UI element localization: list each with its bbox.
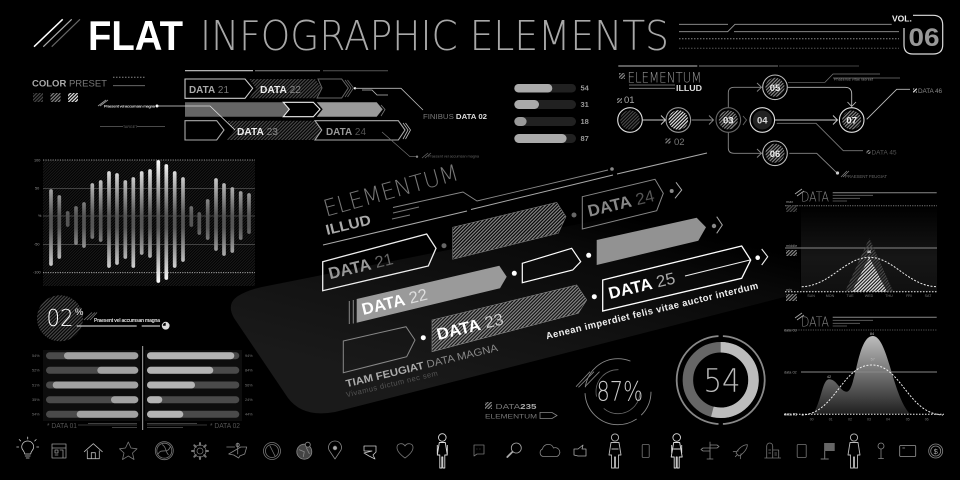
progress bars: top: 54 <box>580 84 590 92</box>
icon: search <box>507 443 521 457</box>
central pointer: row 3 <box>755 249 768 265</box>
icon: woman 1 <box>437 434 447 468</box>
central dot <box>572 212 576 218</box>
icon: woman 2 <box>671 434 682 468</box>
area chart: data levels: 42 <box>827 375 831 379</box>
central hatched arrow: top <box>453 202 566 259</box>
central empty box: row 2 <box>522 248 581 283</box>
flow node 06 <box>763 141 787 166</box>
flow node 06: 06 <box>770 149 780 160</box>
central heading: ELEMENTUM <box>321 160 462 222</box>
icon: home <box>84 444 102 459</box>
gauge: 87 percent <box>576 359 651 425</box>
line chart: weekly data: middle <box>786 244 797 248</box>
icon: cloud <box>540 444 560 456</box>
icon: map pin star <box>328 441 342 459</box>
area chart: data levels: 06 <box>925 418 929 422</box>
comparison bars: data 02: 84% <box>245 368 253 372</box>
flow diagram heading: 02 <box>674 137 685 148</box>
central grey box: row 3 <box>343 327 415 373</box>
flow diagram labels: PRAESENT FEUGIAT <box>845 174 887 179</box>
donut: 54 <box>677 334 765 426</box>
02 percent callout: 02 <box>46 306 74 332</box>
icon: signpost <box>701 442 719 459</box>
central captions <box>345 281 759 399</box>
area chart: data levels: 02 <box>848 418 852 422</box>
central dot <box>592 294 597 299</box>
icon: dollar coin <box>929 444 943 458</box>
flow diagram heading: ILLUD <box>676 84 702 93</box>
02 percent callout: % <box>75 307 84 318</box>
line chart: weekly data: TUE <box>846 294 854 298</box>
icon: tablet <box>797 444 806 458</box>
callout: praesent left: Praesent vel accumsan magna <box>104 104 156 108</box>
flow diagram labels <box>834 78 942 179</box>
icon: star <box>120 442 137 460</box>
central heading: ILLUD <box>324 213 373 239</box>
flow node 04 <box>750 108 775 132</box>
flow diagram heading: ELEMENTUM <box>628 70 702 86</box>
line chart: weekly data: FRI <box>906 294 912 298</box>
area chart: data levels: data 01 <box>784 412 797 416</box>
wave bar chart: -50 <box>34 242 40 246</box>
central bars: data 22 <box>349 266 507 324</box>
icon: man 1 <box>609 434 621 468</box>
icon: store <box>52 444 66 458</box>
icon: globe <box>155 442 173 460</box>
flow diagram connectors <box>643 74 910 173</box>
icon: light bulb <box>17 437 39 458</box>
icon: phone <box>642 444 649 458</box>
icon: map with pin <box>227 443 247 458</box>
panel: tilted dark plate <box>231 180 800 413</box>
chevron process strip: DATA 22 <box>260 84 301 96</box>
volume badge <box>679 14 943 54</box>
progress bars: top: 18 <box>580 117 589 126</box>
area chart: data levels: 01 <box>829 418 833 422</box>
flow node 04: 04 <box>757 116 768 126</box>
central pointer: row 2 <box>712 217 722 233</box>
flow node 03 <box>716 108 741 132</box>
icon: flag <box>821 443 835 459</box>
wave bar chart: 50 <box>35 186 39 190</box>
progress bars: top: 87 <box>580 134 589 143</box>
comparison bars: data 01: 51% <box>32 384 40 388</box>
volume badge: 06 <box>908 24 940 52</box>
area chart: data levels <box>784 313 944 422</box>
area chart: data levels: 05 <box>906 418 910 422</box>
title: INFOGRAPHIC ELEMENTS <box>200 12 669 60</box>
comparison bars: data 02: * DATA 02 <box>210 423 240 430</box>
flow node 07 <box>839 108 864 132</box>
callout: praesent left <box>98 100 235 130</box>
02 percent callout <box>37 295 169 341</box>
comparison bars: data 02: 44% <box>245 412 253 416</box>
wave bar chart: 100 <box>34 158 40 162</box>
central pointer: row 1 <box>670 182 682 198</box>
line chart: weekly data: max <box>786 200 793 204</box>
chevron process strip: DATA 24 <box>326 126 366 138</box>
icon: dollar coin: $ <box>934 447 939 456</box>
line chart: weekly data: MON <box>826 294 835 298</box>
central bars: data 22: DATA 22 <box>360 286 429 319</box>
callout: finibus data 02: FINIBUS DATA 02 <box>423 112 487 121</box>
icon: laptop <box>900 446 916 456</box>
data235 label: DATA 235 <box>496 402 536 411</box>
icon: compass <box>264 442 280 460</box>
central dot <box>586 253 591 258</box>
central box: data 24: DATA 24 <box>586 187 656 221</box>
central hatched bar: data 23 <box>432 285 587 352</box>
chevron process strip <box>185 71 410 140</box>
central dot <box>421 335 426 340</box>
icon: earth with pin <box>297 442 312 459</box>
color preset: COLOR PRESET <box>32 78 107 90</box>
icon: folded ribbon <box>364 446 376 459</box>
flow node 03: 03 <box>723 116 734 126</box>
comparison bars: data 01: 35% <box>32 398 40 402</box>
line chart: weekly data: 46 <box>867 250 871 254</box>
volume badge: VOL. <box>892 14 912 24</box>
title <box>34 12 669 60</box>
central heading <box>321 153 707 245</box>
chevron process strip: DATA 23 <box>237 126 278 138</box>
callout: praesent right <box>382 132 480 158</box>
line chart: weekly data: SUN <box>807 294 815 298</box>
title: FLAT <box>88 12 183 59</box>
comparison bars: data 02 <box>143 346 253 430</box>
wave bar chart <box>33 158 255 286</box>
icon: rocket <box>732 441 751 460</box>
area chart: data levels: 84 <box>870 332 874 336</box>
gauge: 87 percent: 87% <box>596 377 643 408</box>
central box: data 21: DATA 21 <box>327 250 395 283</box>
flow node 05: 05 <box>770 83 781 94</box>
central box: data 25 <box>603 246 751 311</box>
icon: hand <box>574 445 586 456</box>
flow diagram labels: DATA 46 <box>918 88 942 95</box>
icon: heart <box>397 444 413 458</box>
wave bar chart: % <box>38 214 42 218</box>
central dot <box>442 243 446 248</box>
central grey arrow <box>597 218 706 265</box>
central box: data 21 <box>323 234 436 291</box>
flow node 02 <box>666 108 691 132</box>
line chart: weekly data <box>785 189 937 301</box>
comparison bars: data 02: 24% <box>245 398 253 402</box>
icon: buildings <box>765 443 781 458</box>
flow diagram heading: 01 <box>624 95 635 106</box>
flow node 01 <box>618 108 642 132</box>
flow node 07: 07 <box>846 116 857 126</box>
comparison bars: data 01: * DATA 01 <box>47 423 77 430</box>
flow node 05 <box>763 75 787 100</box>
color preset <box>32 77 145 102</box>
callout: finibus data 02 <box>354 87 487 121</box>
area chart: data levels: DATA <box>801 316 829 331</box>
wave bar chart: -100 <box>33 270 41 274</box>
central box: data 24 <box>582 179 663 229</box>
comparison bars: data 01: 54% <box>32 412 40 416</box>
central captions: Vivamus dictum nec sem <box>345 369 439 399</box>
icon: chat <box>474 445 484 456</box>
donut: 54: 54 <box>704 362 740 400</box>
comparison bars: data 02: 94% <box>245 354 253 358</box>
callout: praesent left: TARGET <box>123 125 138 129</box>
area chart: data levels: data 03 <box>784 328 797 332</box>
callout: praesent right: Praesent vel accumsan magna <box>428 154 480 158</box>
comparison bars: data 01: 54% <box>32 354 40 358</box>
line chart: weekly data: THU <box>885 294 893 298</box>
flow diagram heading <box>617 66 859 148</box>
line chart: weekly data: DATA <box>801 191 829 206</box>
icon: lollipop pin <box>878 443 884 458</box>
icon: man 2 <box>848 434 860 468</box>
data235 label <box>485 402 557 420</box>
data235 label: ELEMENTUM <box>485 414 537 420</box>
chevron process strip: DATA 21 <box>189 84 229 96</box>
central dot <box>512 271 517 276</box>
line chart: weekly data: WED <box>865 294 874 298</box>
central captions: TIAM FEUGIAT DATA MAGNA <box>345 342 499 390</box>
area chart: data levels: 00 <box>810 418 814 422</box>
comparison bars: data 01: 52% <box>32 368 40 372</box>
area chart: data levels: 03 <box>867 418 871 422</box>
area chart: data levels: data 02 <box>784 370 797 374</box>
line chart: weekly data: min <box>786 288 792 292</box>
icon: gear <box>192 443 208 459</box>
area chart: data levels: 57 <box>871 358 875 362</box>
progress bars: top <box>514 84 590 143</box>
area chart: data levels: 04 <box>886 418 890 422</box>
progress bars: top: 31 <box>580 100 589 109</box>
02 percent callout: Praesent vel accumsan magna <box>94 318 160 324</box>
comparison bars: data 02: 56% <box>245 384 253 388</box>
line chart: weekly data: SAT <box>925 294 932 298</box>
flow diagram labels: Phasellus vitae laoreet <box>834 78 873 82</box>
central captions: Aenean imperdiet felis vitae auctor interdum <box>545 281 759 342</box>
comparison bars: data 01 <box>32 350 140 430</box>
flow diagram labels: DATA 45 <box>872 150 897 156</box>
central hatched bar: data 23: DATA 23 <box>435 311 505 344</box>
central box: data 25: DATA 25 <box>607 270 677 303</box>
